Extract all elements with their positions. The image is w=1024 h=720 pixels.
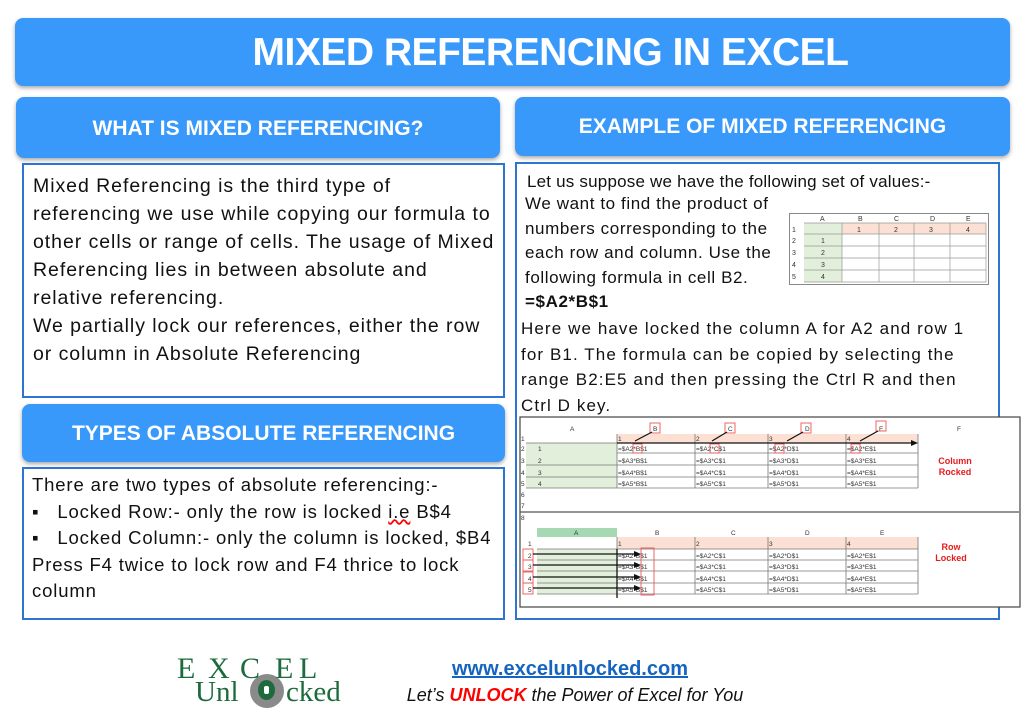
logo: excel unlocked: X bbox=[208, 652, 230, 685]
small data table bbox=[789, 213, 989, 285]
bottom sheet: row locked: =$A5*C$1 bbox=[696, 587, 726, 594]
bottom sheet: row locked: =$A2*D$1 bbox=[769, 553, 799, 560]
small data table: 3 bbox=[792, 250, 796, 257]
small data table: 4 bbox=[821, 274, 825, 281]
text: instructions: numbers corresponding to the bbox=[525, 218, 768, 238]
bottom sheet: row locked: 4 bbox=[847, 541, 851, 548]
bottom sheet: row locked: =$A2*E$1 bbox=[847, 553, 877, 560]
small data table: 3 bbox=[821, 262, 825, 269]
bottom sheet: row locked bbox=[523, 528, 967, 598]
small data table: 4 bbox=[792, 262, 796, 269]
small data table: B bbox=[858, 216, 863, 223]
panel: definition: referencing we use while copying our formula to bbox=[33, 203, 491, 225]
small data table: 4 bbox=[966, 227, 970, 234]
logo: excel unlocked: E bbox=[275, 652, 293, 685]
top sheet: column locked bbox=[521, 421, 972, 510]
logo: excel unlocked: Unl bbox=[195, 676, 238, 708]
text: explanation: Here we have locked the column A for A2 and row 1 bbox=[521, 319, 964, 338]
bottom sheet: row locked: =$A4*E$1 bbox=[847, 576, 877, 583]
panel: types bbox=[22, 467, 505, 620]
top sheet: column locked: =$A3*D$1 bbox=[769, 458, 799, 465]
small data table: 2 bbox=[894, 227, 898, 234]
top sheet: column locked: D bbox=[805, 426, 810, 433]
small data table: C bbox=[894, 216, 899, 223]
bottom sheet: row locked: =$A3*D$1 bbox=[769, 564, 799, 571]
top sheet: column locked: =$A4*B$1 bbox=[618, 470, 648, 477]
small data table: 1 bbox=[792, 227, 796, 234]
top sheet: column locked: =$A5*E$1 bbox=[847, 481, 877, 488]
panel: types: column bbox=[32, 580, 97, 601]
top sheet: column locked: 4 bbox=[847, 436, 851, 443]
bottom sheet: row locked: =$A3*C$1 bbox=[696, 564, 726, 571]
top sheet: column locked: =$A2*C$1 bbox=[696, 446, 726, 453]
bottom sheet: row locked: C bbox=[731, 530, 736, 537]
panel: definition: We partially lock our references, either the row bbox=[33, 315, 480, 337]
top sheet: column locked: =$A3*C$1 bbox=[696, 458, 726, 465]
top sheet: column locked: 4 bbox=[538, 481, 542, 488]
label: column locked: Column bbox=[938, 456, 972, 466]
title bbox=[15, 18, 1010, 86]
top sheet: column locked: A bbox=[570, 426, 575, 433]
top sheet: column locked: 1 bbox=[618, 436, 622, 443]
bottom sheet: row locked: A bbox=[574, 530, 579, 537]
logo: excel unlocked: L bbox=[299, 652, 317, 685]
top sheet: column locked: B bbox=[653, 426, 657, 433]
panel: definition: Mixed Referencing is the third type of bbox=[33, 175, 391, 197]
top sheet: column locked: Rocked bbox=[939, 467, 971, 477]
text: instructions: each row and column. Use the bbox=[525, 243, 771, 262]
heading: what is mixed referencing: WHAT IS MIXED REFERENCING? bbox=[93, 117, 423, 140]
panel: example bbox=[515, 162, 1000, 620]
bottom sheet: row locked: =$A4*B$1 bbox=[618, 576, 648, 583]
top sheet: column locked: =$A5*C$1 bbox=[696, 481, 726, 488]
top sheet: column locked: C bbox=[728, 426, 733, 433]
heading: types: TYPES OF ABSOLUTE REFERENCING bbox=[72, 422, 455, 445]
bottom sheet: row locked: =$A5*E$1 bbox=[847, 587, 877, 594]
bottom sheet: row locked: 4 bbox=[528, 576, 532, 583]
bottom sheet: row locked: =$A2*B$1 bbox=[618, 553, 648, 560]
panel: definition: or column in Absolute Referencing bbox=[33, 343, 361, 365]
small data table: 2 bbox=[821, 250, 825, 257]
top sheet: column locked: 2 bbox=[521, 446, 525, 453]
panel: types: ▪ Locked Row:- only the row is locked i.e B$4 bbox=[32, 500, 452, 522]
top sheet: column locked: 7 bbox=[521, 503, 525, 510]
panel: definition: relative referencing. bbox=[33, 287, 224, 309]
top sheet: column locked: =$A5*B$1 bbox=[618, 481, 648, 488]
text: instructions: =$A2*B$1 bbox=[525, 292, 609, 311]
small data table: 1 bbox=[821, 238, 825, 245]
bottom sheet: row locked: 2 bbox=[696, 541, 700, 548]
top sheet: column locked: =$A2*D$1 bbox=[769, 446, 799, 453]
label: row locked: Row bbox=[942, 542, 961, 552]
top sheet: column locked: 3 bbox=[521, 458, 525, 465]
top sheet: column locked: =$A4*C$1 bbox=[696, 470, 726, 477]
panel: definition: other cells or range of cells. The usage of Mixed bbox=[33, 231, 494, 253]
text: intro: Let us suppose we have the following set of values:- bbox=[527, 172, 931, 191]
top sheet: column locked: E bbox=[879, 426, 884, 433]
small data table: 1 bbox=[857, 227, 861, 234]
bottom sheet: row locked: =$A3*B$1 bbox=[618, 564, 648, 571]
bottom sheet: row locked: 2 bbox=[528, 553, 532, 560]
top sheet: column locked: 1 bbox=[538, 446, 542, 453]
bottom sheet: row locked: 1 bbox=[528, 541, 532, 548]
top sheet: column locked: =$A4*D$1 bbox=[769, 470, 799, 477]
bottom sheet: row locked: 5 bbox=[528, 587, 532, 594]
panel: types: There are two types of absolute referencing:- bbox=[32, 474, 438, 495]
bottom sheet: row locked: =$A2*C$1 bbox=[696, 553, 726, 560]
heading: what is mixed referencing bbox=[16, 97, 500, 158]
footer: website and tagline: www.excelunlocked.com bbox=[452, 658, 688, 680]
title: MIXED REFERENCING IN EXCEL bbox=[253, 31, 848, 74]
small data table: D bbox=[930, 216, 935, 223]
panel: types: ▪ Locked Column:- only the column is locked, $B4 bbox=[32, 527, 491, 548]
bottom sheet: row locked: 3 bbox=[769, 541, 773, 548]
bottom sheet: row locked: =$A5*D$1 bbox=[769, 587, 799, 594]
text: explanation bbox=[521, 319, 964, 414]
top sheet: column locked: 1 bbox=[521, 436, 525, 443]
small data table: A bbox=[820, 216, 825, 223]
top sheet: column locked: 5 bbox=[521, 481, 525, 488]
bottom sheet: row locked: =$A4*C$1 bbox=[696, 576, 726, 583]
bottom sheet: row locked: =$A4*D$1 bbox=[769, 576, 799, 583]
text: explanation: range B2:E5 and then pressing the Ctrl R and then bbox=[521, 370, 957, 389]
panel: definition: Referencing lies in between absolute and bbox=[33, 259, 428, 281]
top sheet: column locked: =$A2*E$1 bbox=[847, 446, 877, 453]
text: instructions bbox=[525, 194, 771, 311]
logo: excel unlocked: cked bbox=[286, 676, 341, 708]
top sheet: column locked: =$A4*E$1 bbox=[847, 470, 877, 477]
top sheet: column locked: 3 bbox=[538, 470, 542, 477]
small data table: E bbox=[966, 216, 971, 223]
logo: excel unlocked bbox=[177, 652, 341, 708]
logo: excel unlocked: C bbox=[240, 652, 260, 685]
top sheet: column locked: =$A3*B$1 bbox=[618, 458, 648, 465]
top sheet: column locked: 2 bbox=[538, 458, 542, 465]
text: explanation: Ctrl D key. bbox=[521, 396, 611, 414]
top sheet: column locked: =$A2*B$1 bbox=[618, 446, 648, 453]
bottom sheet: row locked: E bbox=[880, 530, 885, 537]
panel: definition bbox=[22, 163, 505, 398]
bottom sheet: row locked: D bbox=[805, 530, 810, 537]
bottom sheet: row locked: 1 bbox=[618, 541, 622, 548]
heading: example bbox=[515, 97, 1010, 156]
small data table: 3 bbox=[929, 227, 933, 234]
panel: types: Press F4 twice to lock row and F4 thrice to lock bbox=[32, 554, 459, 574]
bottom sheet: row locked: =$A5*B$1 bbox=[618, 587, 648, 594]
top sheet: column locked: F bbox=[957, 426, 961, 433]
small data table: 5 bbox=[792, 274, 796, 281]
top sheet: column locked: 3 bbox=[769, 436, 773, 443]
footer: website and tagline: Let’s UNLOCK the Power of Excel for You bbox=[407, 685, 743, 705]
bottom sheet: row locked: B bbox=[655, 530, 659, 537]
bottom sheet: row locked: 3 bbox=[528, 564, 532, 571]
top sheet: column locked: =$A5*D$1 bbox=[769, 481, 799, 488]
icon: lock bbox=[250, 674, 284, 708]
bottom sheet: row locked: Locked bbox=[935, 553, 967, 563]
bottom sheet: row locked: =$A3*E$1 bbox=[847, 564, 877, 571]
spreadsheet screenshot: 8 bbox=[521, 515, 525, 522]
top sheet: column locked: =$A3*E$1 bbox=[847, 458, 877, 465]
logo: excel unlocked: E bbox=[177, 652, 195, 685]
small data table: 2 bbox=[792, 238, 796, 245]
top sheet: column locked: 6 bbox=[521, 492, 525, 499]
heading: types bbox=[22, 404, 505, 462]
footer: website and tagline bbox=[407, 658, 743, 705]
text: explanation: for B1. The formula can be copied by selecting the bbox=[521, 344, 955, 364]
text: instructions: following formula in cell B2. bbox=[525, 268, 748, 286]
text: instructions: We want to find the product of bbox=[525, 194, 769, 213]
top sheet: column locked: 2 bbox=[696, 436, 700, 443]
top sheet: column locked: 4 bbox=[521, 470, 525, 477]
heading: example: EXAMPLE OF MIXED REFERENCING bbox=[579, 115, 946, 138]
